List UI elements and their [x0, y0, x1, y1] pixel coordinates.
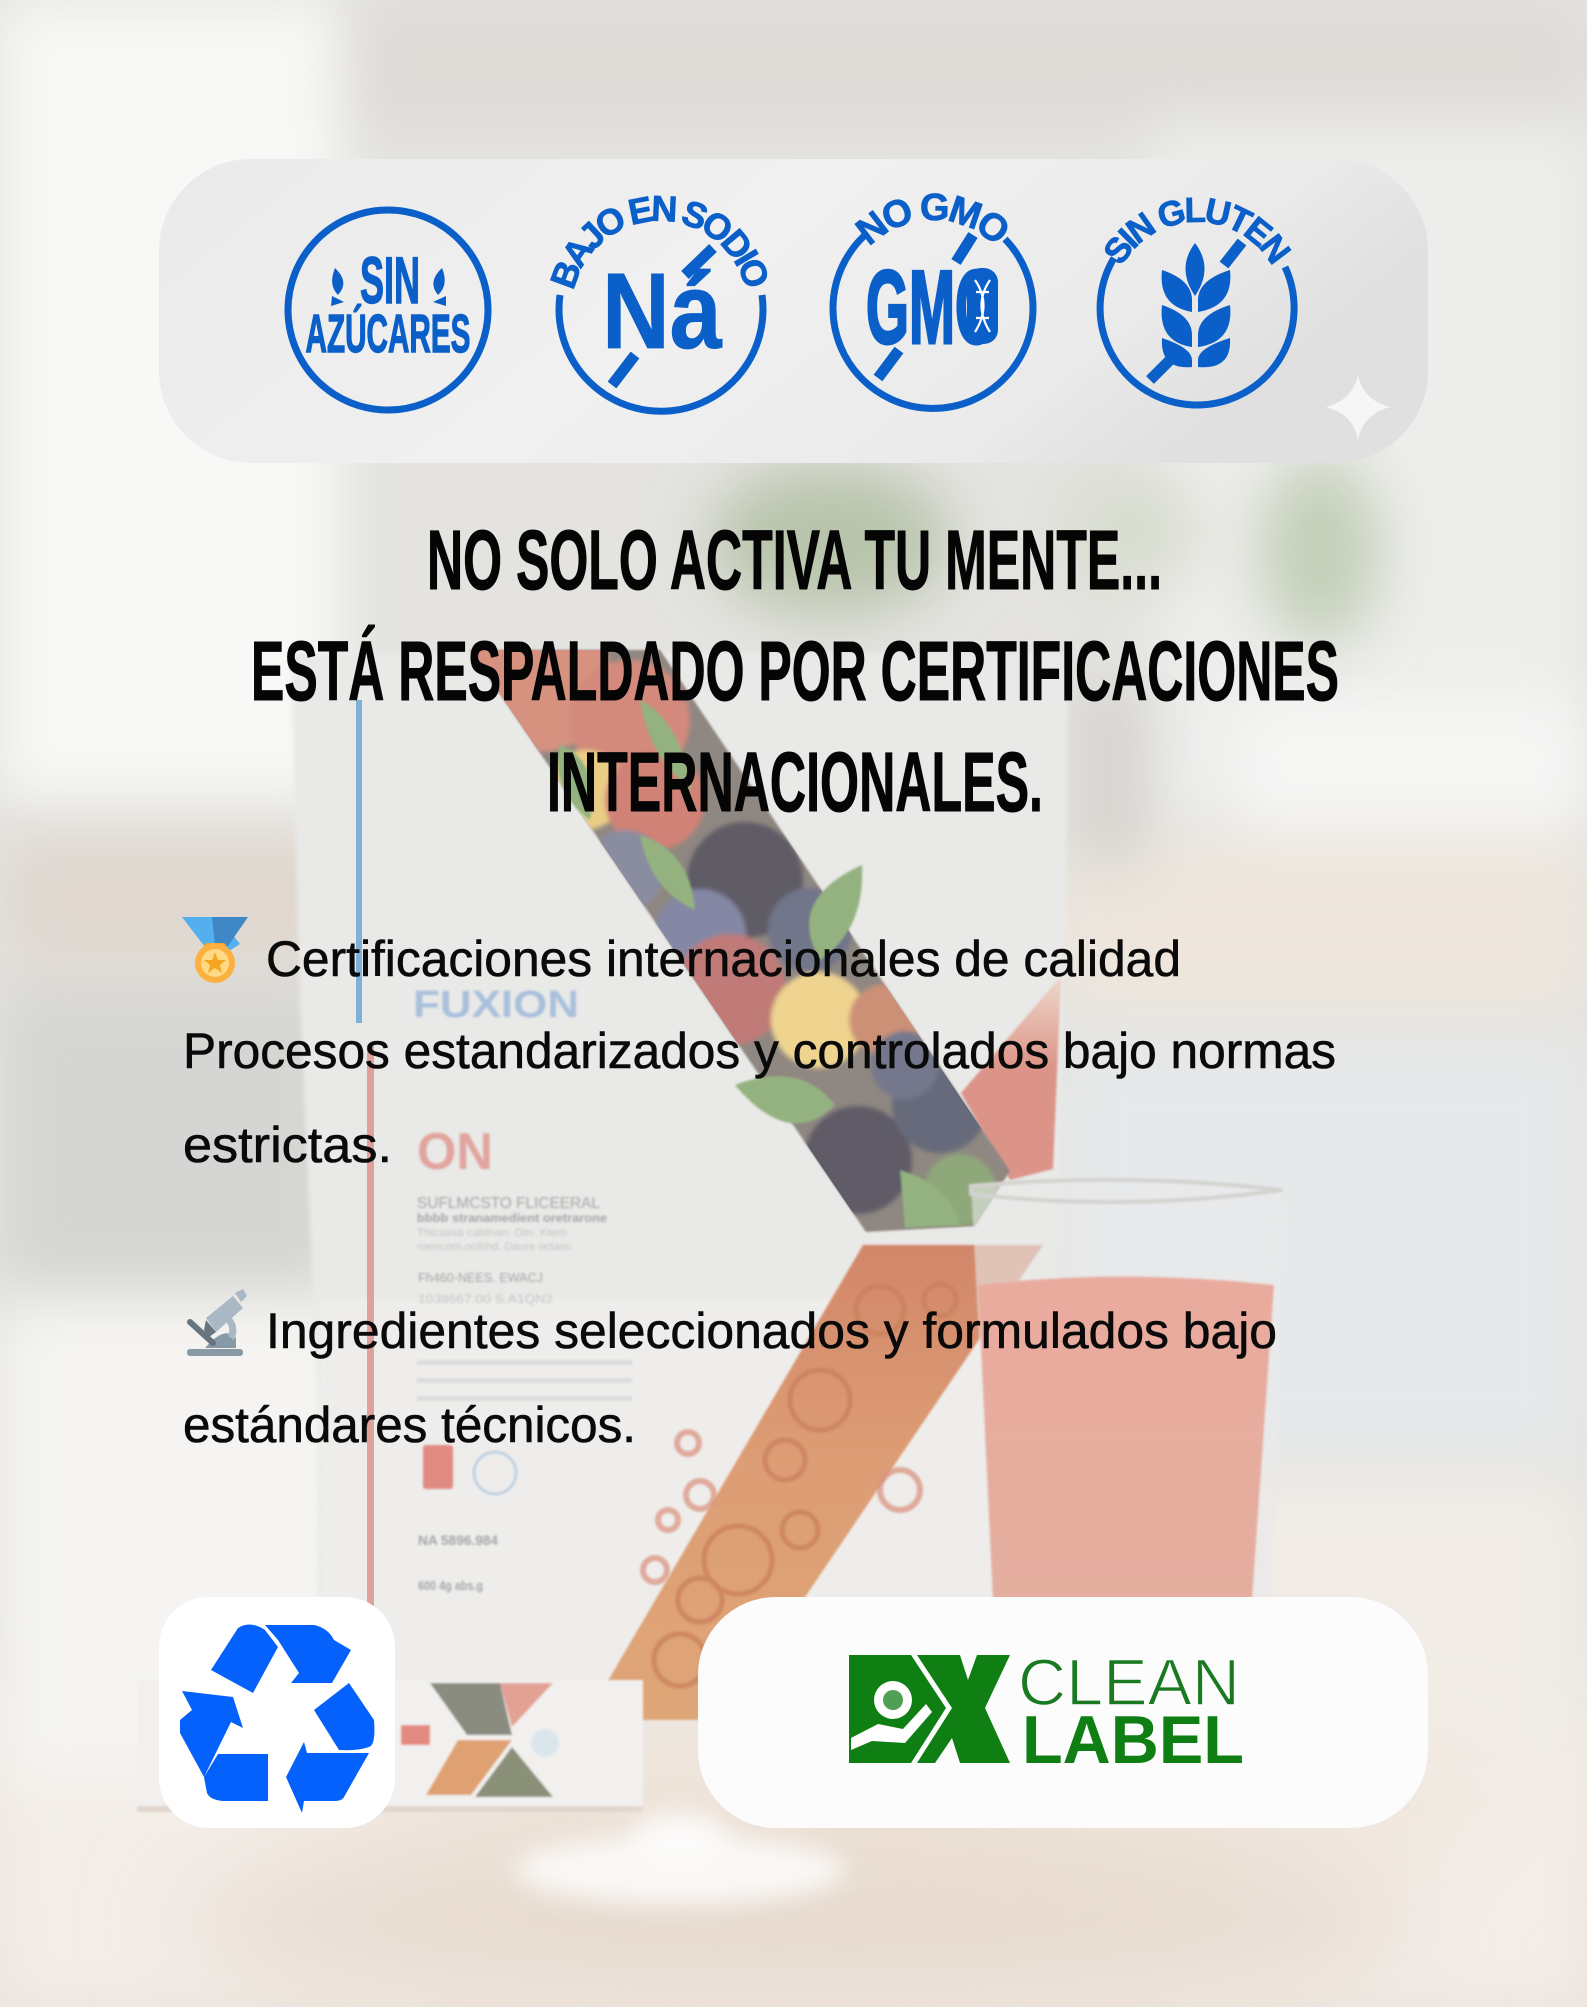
- panel: clean label logo: [698, 1597, 1428, 1828]
- background photo: blurred kitchen scene: roencom,ocibhd. Daure octanc: [417, 1241, 573, 1253]
- badge: bajo en sodio: Ná: [602, 250, 723, 371]
- text block: certificaciones: Certificaciones internacionales de calidad: [266, 931, 1181, 987]
- badge: sin gluten: [1096, 198, 1298, 408]
- badge: bajo en sodio: [550, 196, 768, 415]
- text block: certificaciones: estrictas.: [183, 1117, 392, 1173]
- logo: clean label mark: [849, 1655, 1010, 1763]
- background photo: blurred kitchen scene: Fh460-NEES. EWACJ: [418, 1270, 543, 1285]
- logo text: label: LABEL: [1022, 1702, 1244, 1778]
- text block: certificaciones: Procesos estandarizados y controlados bajo normas: [183, 1023, 1336, 1079]
- background photo: blurred kitchen scene: FUXION: [413, 984, 579, 1026]
- title: INTERNACIONALES.: [547, 735, 1043, 829]
- background photo: blurred kitchen scene: SUFLMCSTO FLICEERAL: [417, 1195, 600, 1212]
- badge: no gmo: [830, 193, 1036, 412]
- badge: bajo en sodio: BAJO EN SODIO: [550, 196, 768, 290]
- text block: ingredientes: estándares técnicos.: [183, 1397, 636, 1453]
- background photo: blurred kitchen scene: 600 4g abs.g: [418, 1578, 483, 1593]
- badge: no gmo: GMO: [866, 250, 998, 366]
- text block: ingredientes: Ingredientes seleccionados y formulados bajo: [266, 1303, 1277, 1359]
- title: [251, 513, 1339, 829]
- icon: medal: [182, 917, 248, 983]
- background photo: blurred kitchen scene: ON: [417, 1123, 493, 1181]
- background photo: blurred kitchen scene: Thicassa cabtnan. Otn. Ktem: [417, 1227, 567, 1239]
- background photo: blurred kitchen scene: 1038667.00 S.A1QN2: [418, 1292, 553, 1306]
- badge: no gmo: NO GMO: [854, 193, 1008, 246]
- background photo: blurred kitchen scene: bbbb stranamedient oretrarone: [417, 1211, 607, 1225]
- badge: sin azucares: [288, 210, 488, 410]
- panel: dietary claim badges: [159, 159, 1428, 463]
- text block: ingredientes: [183, 1303, 1277, 1453]
- text block: certificaciones: [183, 931, 1336, 1173]
- icon: microscope: [187, 1289, 247, 1356]
- logo text: clean: CLEAN: [1018, 1645, 1240, 1719]
- badge: sin azucares: SIN: [360, 243, 420, 317]
- background photo: blurred kitchen scene: NA 5896.984: [418, 1532, 498, 1548]
- panel: recycling icon: [159, 1597, 395, 1828]
- badge: sin gluten: SIN GLUTEN: [1104, 198, 1292, 265]
- icon: sparkle: [1326, 375, 1390, 440]
- icon: recycle arrows: [180, 1624, 374, 1813]
- badge: sin azucares: AZÚCARES: [306, 304, 470, 364]
